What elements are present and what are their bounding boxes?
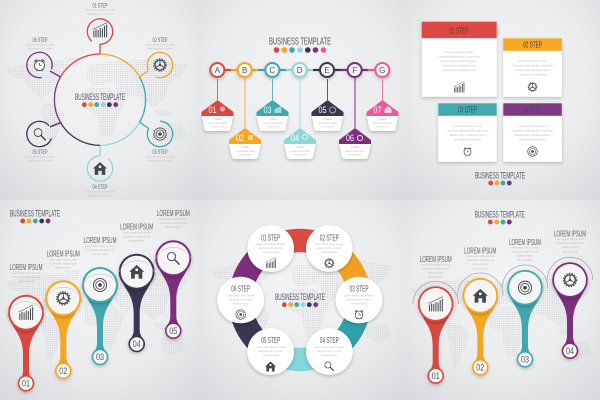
card 04: Lorem ipsum dolor sit amet — [518, 125, 547, 128]
ring segments — [240, 241, 360, 359]
circle 01: interdum luctus — [263, 251, 280, 254]
panel: hexagonal ring with six circles — [210, 225, 393, 375]
step 03: 03 STEP — [152, 149, 168, 156]
circle 05: 05 STEP — [261, 335, 280, 345]
node G: G — [379, 66, 385, 75]
step 06 — [25, 37, 60, 80]
pentagon 02: sit amet elit — [239, 154, 251, 156]
circle 02: 02 STEP — [320, 233, 339, 243]
circle 03: Lorem ipsum dolor sit amet — [345, 294, 374, 298]
circle 04: 04 STEP — [320, 335, 339, 345]
circle 05: adipiscing elit, ut minim — [258, 350, 283, 353]
circle 05 — [247, 328, 294, 375]
pin 05 — [154, 208, 193, 339]
pentagon 02: LOREM — [241, 146, 249, 149]
pentagon 05: sit amet elit — [321, 126, 334, 128]
step 03 — [140, 121, 175, 162]
pin 01: 01 — [432, 371, 440, 381]
pin 03: LOREM IPSUM — [509, 237, 541, 247]
pentagon 06: 06 — [346, 133, 354, 143]
title: BUSINESS TEMPLATE — [75, 92, 125, 102]
node B: B — [242, 66, 247, 75]
card 02: Lorem ipsum dolor sit amet — [518, 60, 547, 63]
circle 04 — [306, 328, 353, 375]
pin 03 — [502, 237, 548, 368]
pentagon 06: sit amet elit — [349, 154, 361, 156]
pin 04: 04 — [566, 346, 574, 356]
pentagon 03: LOREM — [268, 118, 277, 121]
pin 05: aliquam sapien — [165, 226, 182, 229]
node C — [264, 62, 280, 78]
pentagon 04: LOREM — [296, 146, 304, 149]
card 01: Lorem ipsum dolor sit amet — [445, 51, 474, 54]
title: BUSINESS TEMPLATE — [475, 210, 525, 220]
pin 03: sed vestibulum — [517, 259, 533, 262]
node A — [209, 62, 225, 78]
pin 01: LOREM IPSUM — [10, 262, 43, 272]
pentagon 05: LOREM — [323, 118, 332, 121]
circle 04: interdum luctus — [321, 354, 338, 357]
color dots — [82, 102, 118, 107]
circle 01: 01 STEP — [261, 233, 280, 243]
step 06: Lorem ipsum dolor sit amet — [26, 44, 55, 46]
pin 04: Lorem ipsum dolor sit amet — [122, 232, 151, 234]
color dots — [20, 219, 50, 223]
step 01: adipiscing elit, ut minim — [88, 13, 112, 16]
pin 02: aliquam sapien — [55, 266, 72, 270]
pin 02: aliquam sapien — [472, 263, 489, 266]
pin 04: LOREM IPSUM — [120, 222, 153, 232]
step 01 — [82, 2, 118, 54]
pentagon 07: Lorem ipsum dolor — [373, 122, 393, 125]
panel: step cards — [422, 22, 562, 185]
pin 01: 01 — [22, 378, 30, 388]
pentagon 06: Lorem ipsum dolor — [345, 150, 365, 153]
card 02: consectetur adipiscing elit, suspendisse — [512, 64, 554, 68]
pin 04 — [547, 228, 593, 359]
node A: A — [215, 66, 221, 75]
pin 05: LOREM IPSUM — [157, 208, 190, 218]
step 04: Lorem ipsum dolor sit amet — [86, 190, 115, 194]
node C: C — [269, 66, 275, 75]
step 02: adipiscing elit, ut minim — [148, 48, 172, 50]
panel: four pins with gauges — [410, 210, 593, 384]
pin 03: 03 — [96, 352, 104, 362]
step 03: Lorem ipsum dolor sit amet — [146, 156, 175, 158]
panel: circular six step diagram — [5, 2, 188, 197]
pin 02: consectetur adipiscing elit — [467, 259, 494, 262]
card 01: consequat sed vestibulum justo — [442, 64, 476, 68]
circle 06: Lorem ipsum dolor sit amet — [226, 294, 255, 298]
pin 01: Lorem ipsum dolor sit amet — [421, 264, 450, 266]
card 02: 02 STEP — [523, 40, 542, 50]
pin 01: sed vestibulum — [428, 276, 444, 279]
pentagon 01: LOREM — [213, 118, 222, 121]
pin 04: aliquam sapien — [562, 246, 579, 249]
pin 03: Lorem ipsum dolor sit amet — [86, 245, 115, 248]
pin 05: 05 — [169, 326, 177, 336]
pentagon 01: Lorem ipsum dolor — [208, 122, 228, 125]
step 05: Lorem ipsum dolor sit amet — [26, 156, 55, 158]
card 01: 01 STEP — [450, 25, 469, 35]
circle 02: Lorem ipsum dolor sit amet — [315, 243, 344, 246]
pin 02 — [458, 246, 503, 376]
card 01: posuere lacus, fringilla sed nunc — [442, 69, 477, 72]
circle 02: adipiscing elit, ut minim — [317, 247, 342, 250]
node G — [374, 62, 390, 78]
circle 06: interdum luctus — [233, 302, 250, 306]
node B — [237, 62, 253, 78]
pin 02: 02 — [476, 362, 484, 372]
pin 03: consectetur adipiscing elit — [86, 249, 114, 252]
pin 04: aliquam sapien — [129, 240, 145, 242]
color dots — [488, 181, 512, 185]
pin 02 — [44, 248, 83, 379]
node F — [347, 62, 363, 78]
central ring — [54, 54, 146, 145]
world map — [210, 258, 393, 350]
step 04: 04 STEP — [92, 184, 108, 191]
pin 01 — [413, 254, 458, 384]
title: BUSINESS TEMPLATE — [475, 170, 525, 180]
node E: E — [324, 66, 330, 75]
pin 01: aliquam sapien — [18, 280, 35, 283]
card 03: 03 STEP — [458, 105, 477, 115]
pentagon 01: 01 — [208, 105, 216, 115]
pentagon 03: Lorem ipsum dolor — [263, 122, 283, 125]
circle 06 — [217, 277, 264, 323]
pin 01: Lorem ipsum dolor sit amet — [12, 272, 41, 275]
card 04: 04 STEP — [523, 105, 542, 115]
pin 04: sed vestibulum — [562, 250, 578, 254]
card 02: aliquam sapien, vehicula at felis a — [515, 69, 551, 72]
pentagon 03: sit amet elit — [266, 126, 279, 128]
color dots — [282, 302, 318, 307]
circle 02 — [306, 225, 353, 272]
step 02: Lorem ipsum dolor sit amet — [146, 44, 175, 46]
pin 02: sed vestibulum — [472, 268, 488, 270]
pin 02: LOREM IPSUM — [464, 246, 496, 256]
pin 01: consectetur adipiscing elit — [422, 268, 450, 270]
card 04: consectetur adipiscing elit, suspendisse — [512, 130, 554, 132]
pin 03: consectetur adipiscing elit — [511, 250, 539, 254]
card 03: Lorem ipsum dolor sit amet — [453, 125, 482, 128]
pin 03: 03 — [521, 354, 529, 364]
card 03: consectetur adipiscing elit, suspendisse — [446, 130, 489, 132]
pin 01: consectetur adipiscing elit — [12, 276, 40, 279]
card 04 — [503, 103, 562, 162]
step 02: 02 STEP — [152, 37, 168, 44]
step 04 — [82, 146, 118, 198]
pentagon 05: Lorem ipsum dolor — [318, 122, 338, 125]
pentagon 07: sit amet elit — [376, 126, 389, 128]
card 04: consequat sed vestibulum — [519, 138, 546, 142]
node F: F — [352, 66, 357, 75]
pentagon 01: sit amet elit — [211, 126, 224, 128]
pin 05: consectetur adipiscing elit — [160, 222, 187, 225]
world map — [410, 276, 593, 368]
circle 03: interdum luctus — [351, 302, 368, 306]
pin 03: aliquam sapien — [92, 253, 109, 256]
pentagon 05 — [312, 79, 344, 131]
card 01: consectetur adipiscing elit, suspendisse — [438, 56, 481, 58]
circle 04: adipiscing elit, ut minim — [317, 350, 342, 353]
world map — [5, 57, 188, 149]
step 05 — [23, 118, 60, 162]
node D — [292, 62, 308, 78]
circle 05: Lorem ipsum dolor sit amet — [256, 346, 285, 349]
step 04: adipiscing elit, ut minim — [88, 194, 112, 198]
step 03: adipiscing elit, ut minim — [148, 160, 172, 162]
pentagon 02 — [229, 78, 261, 159]
pin 01 — [7, 262, 45, 392]
circle 03 — [336, 277, 382, 323]
pin 02: 02 — [59, 366, 67, 376]
pin 01: aliquam sapien — [428, 272, 444, 274]
pentagon 03: 03 — [264, 105, 272, 115]
step 06: adipiscing elit, ut minim — [28, 48, 52, 50]
circle 01: adipiscing elit, ut minim — [258, 247, 283, 250]
pentagon 04 — [284, 78, 316, 159]
title: BUSINESS TEMPLATE — [275, 292, 325, 302]
connectors — [217, 69, 382, 71]
pin 04: 04 — [133, 339, 141, 349]
step 05: adipiscing elit, ut minim — [28, 160, 52, 162]
pin 05: Lorem ipsum dolor sit amet — [159, 218, 188, 221]
card 01 — [422, 22, 497, 97]
panel: alphabet timeline with pentagons — [202, 35, 398, 159]
pin 02: LOREM IPSUM — [47, 248, 80, 258]
pentagon 05: 05 — [318, 105, 326, 115]
pin 03: Lorem ipsum dolor sit amet — [511, 246, 540, 250]
step 05: 05 STEP — [32, 149, 48, 156]
title: BUSINESS TEMPLATE — [10, 209, 60, 219]
pentagon 01 — [202, 79, 234, 131]
circle 04: Lorem ipsum dolor sit amet — [315, 346, 344, 349]
circle 02: interdum luctus — [321, 251, 338, 254]
card 02: consequat sed vestibulum — [519, 74, 546, 76]
step 01: 01 STEP — [92, 2, 108, 9]
panel: five ascending pins — [5, 208, 193, 392]
pentagon 06 — [339, 78, 371, 159]
step 02 — [140, 37, 177, 82]
card 04: aliquam sapien, vehicula at felis a — [515, 134, 551, 137]
pin 03: aliquam sapien — [517, 254, 534, 258]
pentagon 07: 07 — [374, 105, 382, 115]
circle 01: Lorem ipsum dolor sit amet — [256, 243, 285, 246]
circle 05: interdum luctus — [263, 354, 280, 357]
pin 03 — [81, 235, 119, 365]
circle 06: 06 STEP — [231, 284, 250, 294]
pin 01: LOREM IPSUM — [420, 254, 452, 264]
pentagon 06: LOREM — [351, 146, 359, 149]
pentagon 02: Lorem ipsum dolor — [235, 150, 255, 153]
card 03: aliquam sapien, vehicula at felis a — [450, 134, 486, 137]
pin 02: consectetur adipiscing elit — [50, 262, 77, 266]
pin 02: Lorem ipsum dolor sit amet — [466, 255, 495, 258]
card 03: consequat sed vestibulum — [454, 138, 481, 142]
pin 03: LOREM IPSUM — [84, 235, 117, 245]
circle 03: 03 STEP — [350, 284, 369, 294]
pin 04: Lorem ipsum dolor sit amet — [556, 238, 585, 241]
circle 01 — [247, 225, 294, 272]
pin 04: consectetur adipiscing elit — [123, 236, 151, 238]
world map — [5, 270, 188, 362]
pentagon 04: sit amet elit — [294, 154, 306, 156]
color dots — [274, 47, 326, 53]
pentagon 07 — [366, 79, 398, 131]
pentagon 04: 04 — [291, 133, 299, 143]
circle 03: adipiscing elit, ut minim — [347, 298, 371, 302]
card 01: aliquam sapien, vehicula at felis a — [441, 60, 478, 63]
node E — [319, 62, 335, 78]
pin 04: consectetur adipiscing elit — [556, 242, 584, 245]
color dots — [488, 220, 512, 224]
pentagon 07: LOREM — [378, 118, 387, 121]
step 01: Lorem ipsum dolor sit amet — [86, 9, 115, 12]
pin 02: Lorem ipsum dolor sit amet — [49, 258, 78, 262]
card 03 — [438, 103, 497, 162]
node D: D — [297, 66, 303, 75]
pentagon 02: 02 — [236, 133, 244, 143]
step 06: 06 STEP — [32, 37, 48, 44]
pentagon 03 — [256, 79, 288, 131]
circle 06: adipiscing elit, ut minim — [228, 298, 253, 302]
pin 04 — [117, 222, 156, 352]
pentagon 04: Lorem ipsum dolor — [290, 150, 310, 153]
card 02 — [503, 38, 562, 97]
title: BUSINESS TEMPLATE — [269, 35, 331, 47]
